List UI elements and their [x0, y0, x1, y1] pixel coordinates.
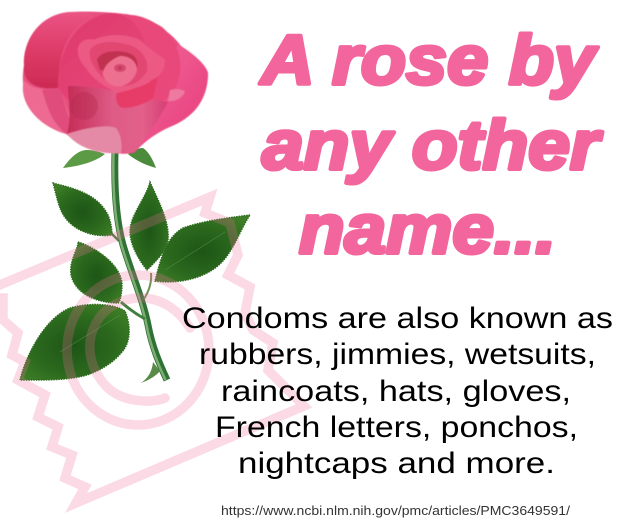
title: name...: [299, 190, 556, 268]
body text: [182, 302, 613, 480]
watermark: condom wrapper outline: [0, 197, 304, 503]
stem: [111, 152, 167, 383]
rose bloom: [23, 12, 208, 154]
body text: raincoats, hats, gloves,: [221, 375, 571, 408]
title: [259, 21, 603, 268]
leaf: middle left: [71, 242, 122, 303]
wrapper outer ring: [67, 275, 209, 425]
title: any other: [262, 106, 603, 184]
body text: rubbers, jimmies, wetsuits,: [199, 338, 596, 371]
source URL: https://www.ncbi.nlm.nih.gov/pmc/articles/PMC3649591/: [221, 504, 571, 518]
leaf: lower left: [20, 304, 129, 380]
leaf: top left: [53, 183, 112, 236]
body text: Condoms are also known as: [182, 302, 613, 335]
leaf: right: [155, 215, 250, 282]
rose illustration: [20, 12, 250, 383]
wrapper inner spiral: [90, 298, 190, 401]
body text: nightcaps and more.: [238, 447, 555, 480]
title: A rose by: [259, 21, 598, 99]
leaf: top centre: [130, 182, 168, 270]
body text: French letters, ponchos,: [215, 411, 578, 444]
sepals: [63, 148, 156, 168]
wrapper outline: [0, 197, 304, 503]
